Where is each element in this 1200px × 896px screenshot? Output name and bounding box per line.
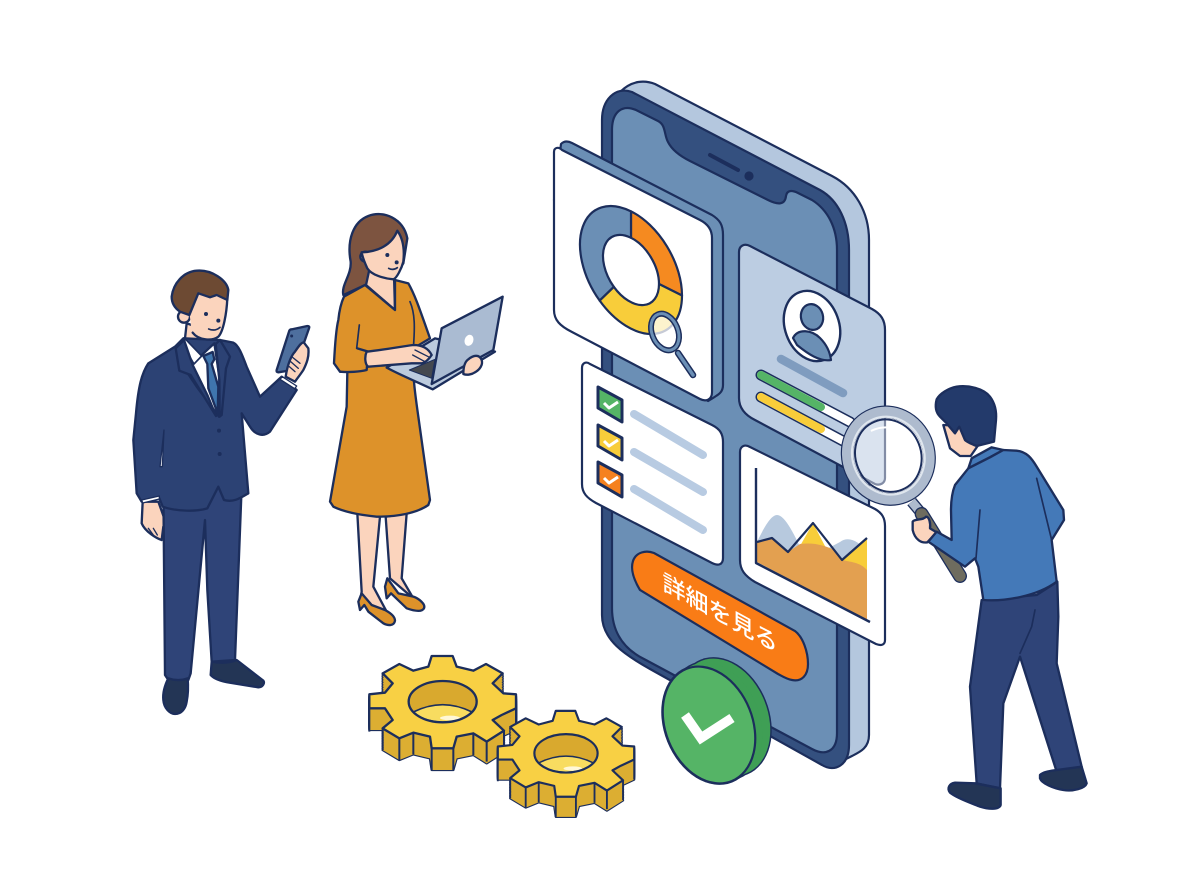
- shirt lines: [976, 478, 1052, 558]
- blue background area: [757, 515, 867, 600]
- avatar: [774, 283, 850, 369]
- chart axes: [756, 468, 870, 622]
- check mark: [685, 715, 732, 738]
- card back edge: [554, 142, 723, 401]
- neck: [366, 267, 395, 310]
- trousers: [163, 487, 242, 680]
- donut segment blue: [580, 186, 631, 316]
- right shoe: [1040, 767, 1087, 790]
- phone screen with notch: [612, 108, 837, 752]
- phone speaker: [710, 155, 738, 170]
- orange checkbox: [598, 462, 622, 497]
- right hand: [286, 343, 309, 382]
- shirt collar: [968, 447, 1003, 468]
- hair: [936, 386, 996, 446]
- jacket buttons: [217, 429, 222, 456]
- laptop: [387, 297, 503, 389]
- gear small: [498, 711, 634, 817]
- hand: [913, 517, 937, 543]
- checklist card body: [582, 363, 723, 565]
- chart card body: [740, 446, 885, 645]
- eyes: [204, 312, 220, 323]
- profile name bar: [781, 359, 843, 393]
- shirt: [183, 338, 219, 417]
- magnifier lens: [834, 399, 943, 512]
- phone dark frame: [602, 91, 849, 768]
- phone camera: [746, 172, 752, 180]
- phone in hand: [277, 326, 309, 372]
- jacket: [133, 338, 297, 511]
- profile card body: [739, 245, 885, 485]
- gears: [369, 656, 634, 817]
- smile: [209, 327, 220, 330]
- right shoe: [211, 660, 264, 687]
- badge side: [644, 643, 789, 799]
- forearm and typing hand: [365, 345, 432, 367]
- card: profile: [739, 245, 885, 485]
- chart areas: [757, 515, 867, 621]
- hand finger lines: [148, 528, 157, 535]
- donut segment yellow: [600, 254, 682, 354]
- tie: [203, 352, 218, 413]
- yellow checkbox: [598, 425, 622, 460]
- face and neck: [943, 425, 978, 456]
- left lapel: [176, 340, 216, 416]
- button: detail: [632, 552, 808, 680]
- eyes: [385, 253, 399, 264]
- chart line: [757, 523, 867, 560]
- card front: [554, 148, 712, 400]
- neck: [185, 323, 215, 357]
- checklist text lines: [634, 414, 703, 530]
- left shoe: [358, 593, 395, 625]
- green check badge: [644, 643, 789, 799]
- ear: [178, 311, 190, 323]
- green progress bar: [761, 375, 850, 422]
- left shoe: [949, 783, 1001, 809]
- yellow progress bar: [761, 397, 845, 442]
- woman with laptop: [330, 214, 503, 625]
- left shoe: [163, 678, 188, 714]
- man in suit with phone: [133, 271, 309, 714]
- green checkbox: [598, 387, 622, 422]
- magnifier handle: [912, 502, 960, 576]
- right leg: [386, 513, 413, 598]
- phone hand finger lines: [289, 357, 300, 372]
- hair: [172, 271, 228, 315]
- laptop logo: [463, 334, 475, 347]
- left hand: [142, 502, 167, 540]
- sleeve line: [357, 302, 414, 353]
- phone light outer rim: [620, 82, 869, 767]
- left cuff: [142, 496, 159, 503]
- phone camera dot: [290, 334, 293, 337]
- hand under laptop: [463, 356, 482, 375]
- dress: [330, 280, 430, 517]
- shirt: [928, 450, 1064, 600]
- right shoe: [385, 578, 424, 611]
- left collar: [184, 338, 202, 364]
- laptop lid: [432, 297, 503, 384]
- trouser fold: [1020, 610, 1035, 653]
- sleeve end: [340, 348, 368, 372]
- badge face: [646, 653, 772, 797]
- right cuff: [280, 377, 297, 389]
- card: area chart: [740, 446, 885, 645]
- gear large: [369, 656, 516, 770]
- sleeve gap: [160, 430, 164, 467]
- smile: [389, 268, 397, 269]
- orange area: [757, 538, 867, 621]
- face: [188, 293, 227, 339]
- phone device: [602, 82, 869, 768]
- finger lines: [413, 350, 428, 362]
- trousers: [970, 582, 1082, 788]
- button label: 詳細を見る: [663, 569, 777, 658]
- hair: [343, 214, 407, 295]
- laptop base: [387, 338, 495, 389]
- left leg: [357, 513, 387, 612]
- laptop keyboard: [409, 359, 435, 378]
- lens highlight: [872, 427, 886, 431]
- card: donut chart: [554, 142, 723, 401]
- small magnifier: [646, 310, 693, 375]
- donut chart: [580, 186, 682, 354]
- yellow area: [800, 523, 867, 621]
- card: checklist: [582, 363, 723, 565]
- right lapel: [216, 340, 230, 417]
- man with magnifying glass: [834, 386, 1087, 809]
- ear: [360, 252, 370, 262]
- donut segment orange: [631, 211, 682, 296]
- face: [362, 231, 404, 279]
